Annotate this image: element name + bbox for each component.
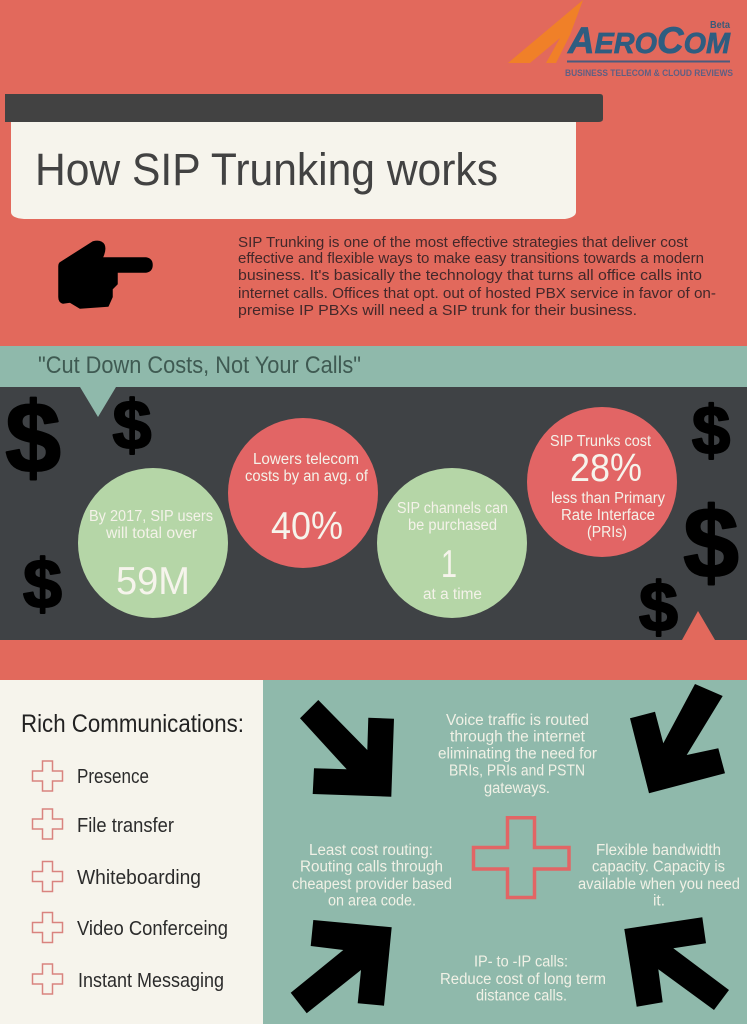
text: voice traffic: BRIs, PRIs and PSTN bbox=[449, 763, 585, 780]
text: flexible bandwidth: it. bbox=[653, 893, 665, 910]
icon: dollar signs bbox=[5, 382, 739, 646]
list: communication features: Video Conferceing bbox=[77, 918, 228, 940]
intro text block: internet calls. Offices that opt. out of hosted PBX service in favor of on- bbox=[238, 285, 716, 302]
arrow: top right bbox=[630, 684, 725, 793]
text: flexible bandwidth: available when you need bbox=[578, 876, 740, 893]
stat circle: 28% bbox=[527, 407, 677, 557]
text: least cost routing: Routing calls through bbox=[300, 859, 443, 876]
panel: cut down costs bbox=[0, 346, 747, 640]
arrow: bottom right bbox=[624, 917, 729, 1010]
intro text block: effective and flexible ways to make easy transitions towards a modern bbox=[238, 250, 704, 267]
heading: rich communications: Rich Communications: bbox=[21, 710, 244, 738]
stat circle: 1 at a time bbox=[377, 468, 527, 618]
stat circle: 40% bbox=[228, 418, 378, 568]
text: least cost routing: on area code. bbox=[328, 893, 416, 910]
stat circle: 1 at a time: 1 bbox=[441, 543, 457, 586]
stat circle: 59M bbox=[78, 468, 228, 618]
title banner: How SIP Trunking works bbox=[35, 144, 498, 195]
stat circle: 1 at a time: at a time bbox=[423, 586, 482, 603]
stat circle: 28%: (PRIs) bbox=[587, 524, 627, 541]
title banner bbox=[5, 94, 603, 219]
icon: dollar signs: $ bbox=[683, 487, 739, 599]
stat circle: 59M: will total over bbox=[105, 525, 197, 542]
icon: dollar signs: $ bbox=[692, 392, 730, 469]
stat circle: 40%: 40% bbox=[271, 505, 343, 548]
text: IP to IP calls bbox=[440, 954, 606, 1005]
stat circle: 28%: 28% bbox=[570, 447, 642, 490]
stat circle: 40%: Lowers telecom bbox=[253, 451, 359, 468]
text: IP to IP calls: IP- to -IP calls: bbox=[474, 954, 568, 971]
text: voice traffic: Voice traffic is routed bbox=[446, 712, 589, 729]
text: voice traffic bbox=[438, 712, 597, 797]
list: communication features bbox=[32, 761, 228, 994]
list: communication features: Whiteboarding bbox=[77, 867, 201, 889]
text: flexible bandwidth: Flexible bandwidth bbox=[596, 842, 721, 859]
text: voice traffic: gateways. bbox=[484, 780, 550, 797]
list: communication features: File transfer bbox=[77, 815, 174, 837]
panel: benefits bbox=[263, 680, 747, 1024]
panel: rich communications bbox=[0, 680, 295, 1024]
intro text block: premise IP PBXs will need a SIP trunk for their business. bbox=[238, 302, 637, 319]
text: flexible bandwidth bbox=[578, 842, 740, 910]
list: communication features: Presence bbox=[77, 766, 149, 788]
text: IP to IP calls: distance calls. bbox=[476, 988, 567, 1005]
arrow: top left bbox=[300, 700, 394, 797]
list: communication features: Instant Messaging bbox=[78, 970, 224, 992]
icon: dollar signs: $ bbox=[113, 386, 151, 464]
text: least cost routing: cheapest provider based bbox=[292, 876, 452, 893]
text: flexible bandwidth: capacity. Capacity is bbox=[592, 859, 725, 876]
text: voice traffic: through the internet bbox=[450, 729, 586, 746]
logo: AeroCom: AEROCOM bbox=[567, 20, 731, 61]
quote heading: "Cut Down Costs, Not Your Calls" bbox=[38, 352, 361, 379]
stat circle: 40%: costs by an avg. of bbox=[245, 468, 369, 485]
text: least cost routing bbox=[292, 842, 452, 910]
stat circle: 59M: By 2017, SIP users bbox=[89, 508, 213, 525]
icon: pointing hand bbox=[59, 241, 152, 308]
stat circle: 28%: Rate Interface bbox=[561, 507, 655, 524]
logo: AeroCom: BUSINESS TELECOM & CLOUD REVIEWS bbox=[565, 68, 733, 78]
stat circle: 1 at a time: SIP channels can bbox=[397, 500, 508, 517]
icon: dollar signs: $ bbox=[639, 568, 678, 646]
icon: center plus bbox=[474, 818, 569, 898]
stat circle: 59M: 59M bbox=[116, 560, 190, 603]
intro text block: SIP Trunking is one of the most effective strategies that deliver cost bbox=[238, 234, 689, 251]
text: IP to IP calls: Reduce cost of long term bbox=[440, 971, 606, 988]
stat circle: 28%: SIP Trunks cost bbox=[550, 433, 652, 450]
text: least cost routing: Least cost routing: bbox=[309, 842, 433, 859]
text: voice traffic: eliminating the need for bbox=[438, 745, 597, 762]
arrow: bottom left bbox=[291, 920, 392, 1013]
icon: dollar signs: $ bbox=[23, 545, 62, 623]
stat circle: 28%: less than Primary bbox=[551, 490, 665, 507]
stat circle: 1 at a time: be purchased bbox=[408, 517, 497, 534]
logo: AeroCom: Beta bbox=[710, 20, 730, 31]
logo: AeroCom bbox=[508, 0, 733, 78]
intro text block: business. It's basically the technology that turns all office calls into bbox=[238, 267, 702, 284]
icon: dollar signs: $ bbox=[5, 382, 61, 494]
intro text block bbox=[238, 234, 716, 319]
